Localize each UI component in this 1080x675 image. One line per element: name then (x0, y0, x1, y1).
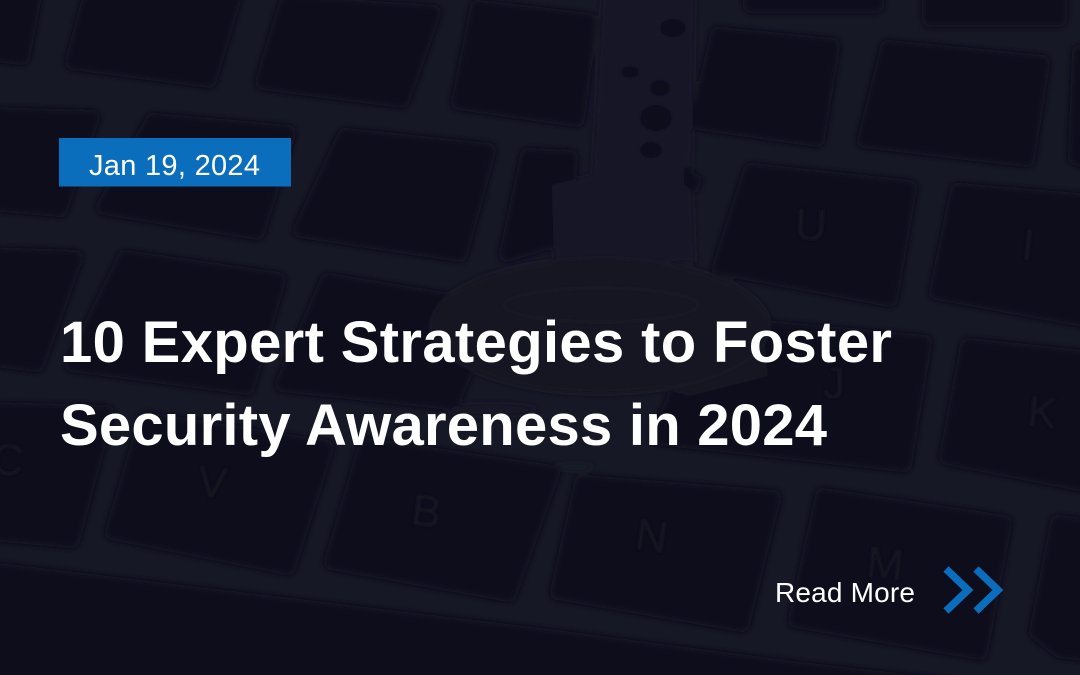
background: dark keyboard photo: V (195, 457, 230, 509)
background: dark keyboard photo: I (1019, 220, 1037, 270)
background: dark keyboard photo: B (408, 485, 444, 538)
background: dark keyboard photo: N (632, 510, 671, 563)
background: dark keyboard photo: K (1025, 387, 1060, 439)
date badge: Jan 19, 2024 (89, 150, 260, 182)
background: dark keyboard photo: U (794, 200, 828, 251)
title: 10 Expert Strategies to Foster (60, 310, 892, 375)
title: Security Awareness in 2024 (60, 393, 827, 458)
background: dark keyboard photo: J (823, 359, 845, 408)
date badge (59, 138, 291, 186)
background: dark keyboard photo: M (864, 538, 906, 590)
title (60, 310, 892, 458)
icon: double chevron arrow (946, 569, 998, 611)
read more link: Read More (775, 577, 915, 608)
read more link (775, 569, 998, 611)
